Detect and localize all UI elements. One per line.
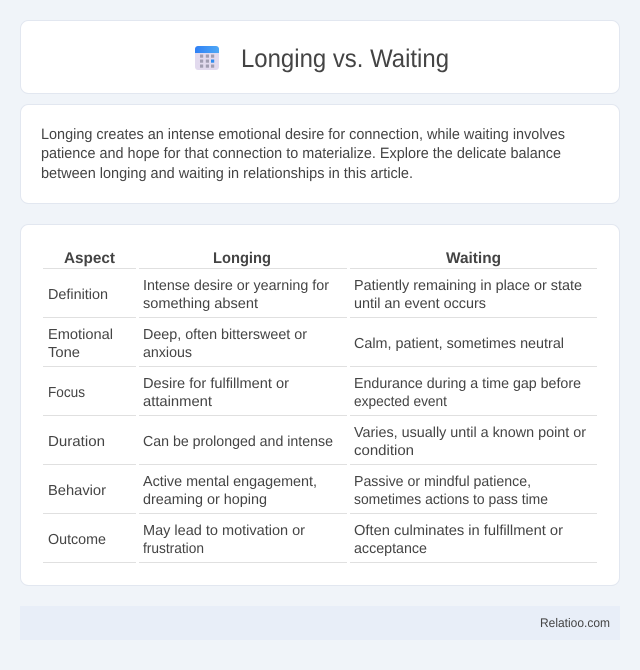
row: outcome: frustration [143,541,204,557]
row: behavior: sometimes actions to pass time [354,492,548,508]
row: outcome [48,523,563,557]
row: emotional tone: Emotional [48,327,113,343]
row: focus: expected event [354,394,447,410]
row: duration: Varies, usually until a known point or [354,425,586,441]
table header row: Waiting [446,250,501,267]
row: behavior: Behavior [48,483,106,499]
row: outcome: Often culminates in fulfillment or [354,523,563,539]
row: emotional tone: Calm, patient, sometimes neutral [354,336,564,352]
row: duration: Duration [48,434,105,450]
row: focus: Desire for fulfillment or [143,376,289,392]
row: emotional tone: Tone [48,345,80,361]
row: emotional tone: anxious [143,345,192,361]
table header row: Longing [213,250,271,267]
row: focus: Endurance during a time gap before [354,376,581,392]
row: duration: Can be prolonged and intense [143,434,333,450]
row: definition: something absent [143,296,258,312]
title: Longing vs. Waiting [241,45,449,73]
row: behavior: dreaming or hoping [143,492,267,508]
row: behavior [48,474,548,508]
row: emotional tone: Deep, often bittersweet or [143,327,307,343]
intro text: between longing and waiting in relationships in this article. [41,165,413,182]
footer [20,606,620,640]
intro text: patience and hope for that connection to materialize. Explore the delicate balance [41,145,561,162]
row: duration: condition [354,443,414,459]
row: outcome: Outcome [48,532,106,548]
panel: introduction [20,104,620,204]
footer: Relatioo.com [540,616,610,630]
row: focus: attainment [143,394,212,410]
row: focus [48,376,581,410]
intro text: Longing creates an intense emotional desire for connection, while waiting involves [41,126,565,143]
row: definition: Definition [48,287,108,303]
intro text [41,126,565,182]
row: definition: Intense desire or yearning for [143,278,329,294]
row: emotional tone [48,327,564,361]
row: definition: until an event occurs [354,296,486,312]
row: focus: Focus [48,385,85,401]
table header row: Aspect [64,250,115,267]
row: behavior: Passive or mindful patience, [354,474,531,490]
panel: header [20,20,620,94]
row: behavior: Active mental engagement, [143,474,317,490]
row: duration [48,425,586,459]
row: definition [48,278,582,312]
row: outcome: May lead to motivation or [143,523,305,539]
panel: comparison table [20,224,620,586]
row: outcome: acceptance [354,541,427,557]
table header row [64,250,501,267]
row: definition: Patiently remaining in place or state [354,278,582,294]
icon: calendar [195,46,219,70]
